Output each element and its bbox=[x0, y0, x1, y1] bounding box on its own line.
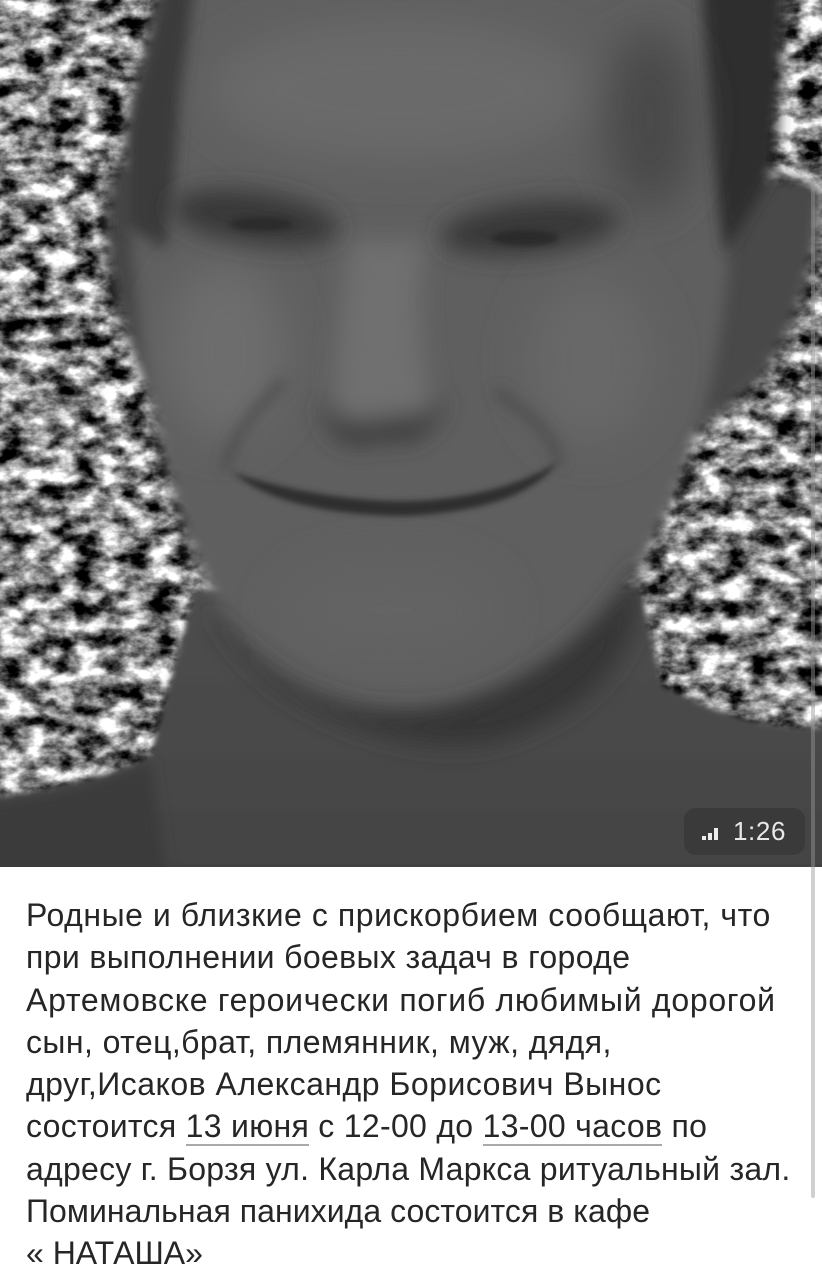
face bbox=[129, 0, 770, 715]
right ear bbox=[650, 176, 822, 435]
left ear bbox=[104, 160, 210, 410]
scroll indicator bbox=[811, 178, 815, 1198]
memorial text block: адресу г. Борзя ул. Карла Маркса ритуальный зал. bbox=[26, 1151, 790, 1187]
skin tone shading bbox=[165, 20, 695, 660]
video duration badge bbox=[684, 808, 805, 855]
photo: black and white portrait with foliage background bbox=[0, 0, 822, 867]
hair: left side bbox=[125, 0, 195, 250]
memorial text block: друг,Исаков Александр Борисович Вынос bbox=[26, 1066, 662, 1102]
nasolabial folds bbox=[225, 380, 560, 470]
hair: right side bbox=[700, 0, 790, 255]
nose bbox=[322, 240, 445, 444]
eyes bbox=[230, 217, 559, 246]
mouth smile bbox=[232, 462, 558, 516]
jaw shadow bbox=[205, 560, 641, 745]
memorial text block: Родные и близкие с прискорбием сообщают, что bbox=[26, 897, 771, 933]
memorial text block: при выполнении боевых задач в городе bbox=[26, 939, 630, 975]
eye shadows bbox=[167, 180, 622, 263]
lower left shadow bbox=[0, 760, 170, 900]
memorial text block: сын, отец,брат, племянник, муж, дядя, bbox=[26, 1024, 612, 1060]
memorial text block: « НАТАША» bbox=[26, 1235, 203, 1271]
torso and shoulders bbox=[0, 590, 822, 900]
background foliage texture bbox=[0, 0, 822, 867]
memorial text block: состоится 13 июня с 12-00 до 13-00 часов по bbox=[26, 1108, 707, 1144]
memorial text block: Поминальная панихида состоится в кафе bbox=[26, 1193, 650, 1229]
memorial text block bbox=[26, 897, 790, 1271]
memorial text block: Артемовске героически погиб любимый дорогой bbox=[26, 982, 776, 1018]
video duration badge: 1:26 bbox=[733, 816, 786, 846]
icon: signal bars bbox=[702, 828, 718, 840]
